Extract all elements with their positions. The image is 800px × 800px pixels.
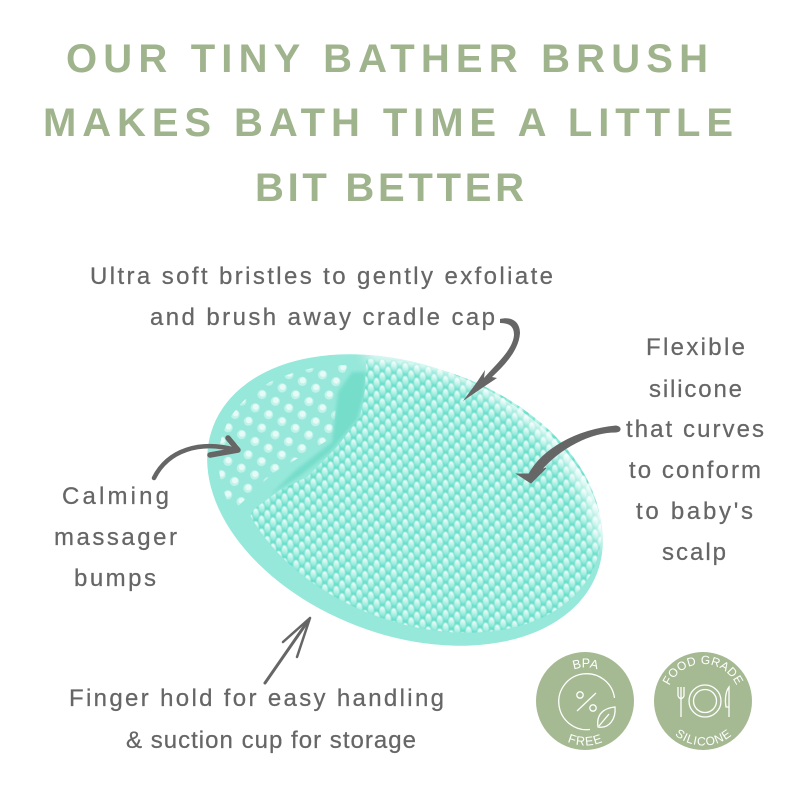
caption: flexible silicone: to conform bbox=[629, 457, 761, 484]
caption: flexible silicone: silicone bbox=[649, 376, 742, 403]
caption: flexible silicone: scalp bbox=[662, 539, 726, 566]
title: MAKES BATH TIME A LITTLE bbox=[43, 101, 733, 145]
overexposed edge bbox=[367, 350, 608, 545]
caption: finger hold: Finger hold for easy handling bbox=[69, 685, 444, 712]
title: BIT BETTER bbox=[255, 166, 524, 210]
caption: bristles: and brush away cradle cap bbox=[150, 304, 495, 331]
icon: plate with fork and knife bbox=[678, 685, 729, 717]
badge text: BPA bbox=[572, 658, 598, 670]
brush base bbox=[165, 301, 645, 699]
caption: flexible silicone bbox=[626, 334, 764, 566]
recessed band between zones bbox=[270, 372, 366, 495]
arrow: to bristles bbox=[463, 318, 520, 401]
caption: flexible silicone: Flexible bbox=[646, 334, 745, 361]
caption: finger hold: & suction cup for storage bbox=[126, 727, 416, 754]
caption: flexible silicone: that curves bbox=[626, 416, 764, 443]
caption: bristles bbox=[90, 263, 553, 331]
bristles area bbox=[250, 359, 601, 633]
massager bumps area bbox=[219, 365, 347, 506]
arrow: to massager bumps bbox=[154, 438, 238, 478]
badge: food grade silicone: SILICONE bbox=[676, 729, 732, 746]
badge: BPA free bbox=[536, 652, 634, 750]
caption: flexible silicone: to baby's bbox=[636, 498, 753, 525]
title: OUR TINY BATHER BRUSH bbox=[66, 37, 708, 81]
caption: bristles: Ultra soft bristles to gently exfoliate bbox=[90, 263, 553, 290]
arrow: to finger hold bbox=[265, 618, 310, 683]
caption: massager bumps: massager bbox=[54, 524, 177, 551]
badge text: FOOD GRADE bbox=[662, 656, 744, 685]
caption: finger hold bbox=[69, 685, 444, 754]
title bbox=[43, 37, 733, 210]
brush illustration bbox=[207, 354, 603, 646]
badge: BPA free: FREE bbox=[568, 734, 602, 746]
arrow: to flexible silicone bbox=[517, 426, 620, 483]
caption: massager bumps bbox=[54, 483, 177, 592]
caption: massager bumps: Calming bbox=[62, 483, 169, 510]
badge: food grade silicone bbox=[654, 652, 752, 750]
icon: percent in circle with leaf bbox=[559, 674, 615, 730]
caption: massager bumps: bumps bbox=[74, 565, 156, 592]
